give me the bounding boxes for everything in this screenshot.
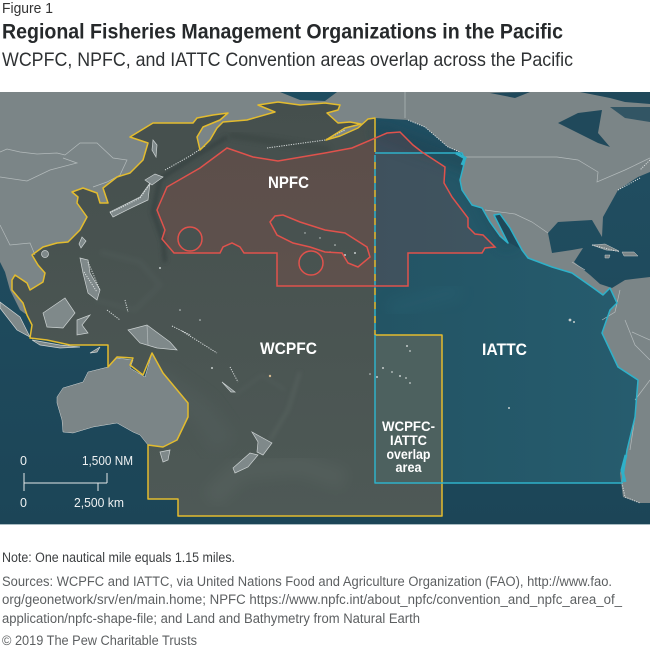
NPFC convention area [157,132,495,286]
label: IATTC: IATTC [482,340,527,359]
sources [2,574,622,626]
land: Australia [57,353,188,447]
panel: IATTC convention area [375,153,638,483]
label: WCPFC-IATTC overlap area: WCPFC- [382,419,435,434]
land: Caribbean islands [592,244,638,258]
subtitle: WCPFC, NPFC, and IATTC Convention areas overlap across the Pacific [2,49,573,71]
IATTC boundary [375,153,638,483]
note: Note: One nautical mile equals 1.15 miles. [2,550,235,565]
label: WCPFC: WCPFC [260,339,317,358]
sources: Sources: WCPFC and IATTC, via United Nations Food and Agriculture Organization (FAO), http://www.fao. [2,574,612,589]
land: North and South America [375,92,650,503]
label: WCPFC-IATTC overlap area: area [396,460,422,475]
panel: WCPFC convention area [12,102,442,516]
NPFC boundary [157,132,495,286]
land: Asia-Pacific islands [0,140,272,473]
IATTC coastal thick segments [456,153,626,482]
title: Regional Fisheries Management Organizations in the Pacific [2,20,563,44]
scale bar [20,454,133,510]
land: Arctic sea wedge [280,92,337,101]
country borders [0,92,650,450]
WCPFC boundary [12,102,442,516]
label: WCPFC-IATTC overlap area: IATTC [390,433,427,448]
sources: org/geonetwork/srv/en/main.home; NPFC https://www.npfc.int/about_npfc/convention_and_npfc_area_of_ [2,592,622,607]
sources: application/npfc-shape-file; and Land and Bathymetry from Natural Earth [2,611,420,626]
figure label: Figure 1 [2,1,53,17]
scale bar: 2,500 km [74,496,124,510]
map [0,92,650,525]
label: WCPFC-IATTC overlap area [382,422,434,472]
land: Hudson Bay and northern waters [490,92,650,147]
rugged coast highlights [84,120,650,503]
scale bar: 0 [20,496,27,510]
Pacific islands [159,232,575,409]
panel: WCPFC-IATTC overlap fill [375,335,442,483]
scale bar: 0 [20,454,27,468]
label: WCPFC-IATTC overlap area: overlap [386,447,430,462]
scale bar: 1,500 NM [82,454,133,468]
land: Eurasia and Alaska [0,92,375,315]
label: NPFC: NPFC [268,173,309,192]
shared dashed boundary [374,155,376,335]
